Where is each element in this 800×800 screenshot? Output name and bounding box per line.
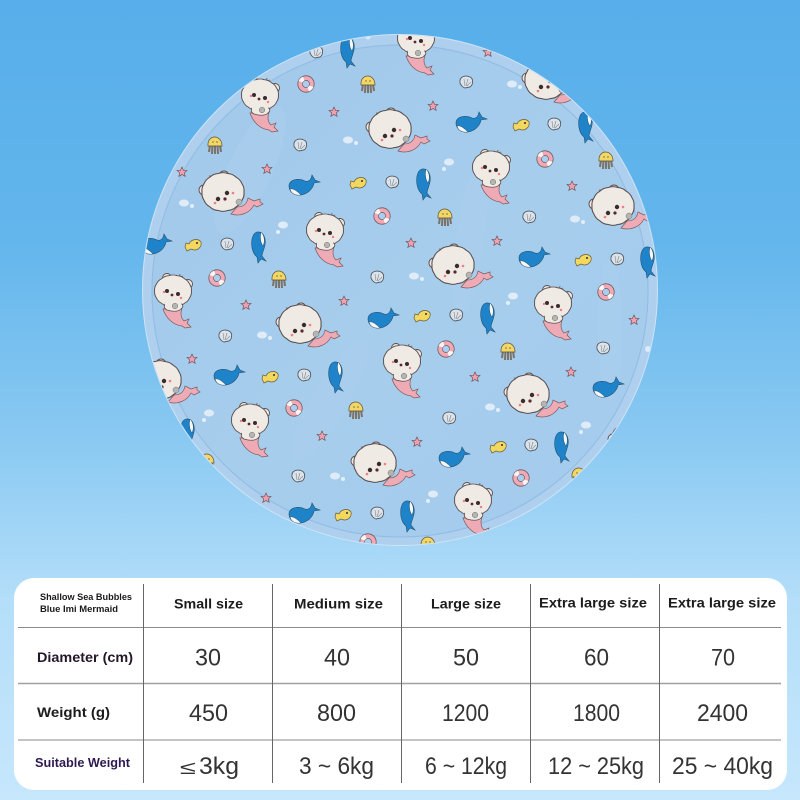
column headers: Extra large size [668, 594, 776, 610]
suitable weight values: 25 ~ 40kg [672, 753, 773, 780]
suitable weight values: 3kg [199, 753, 239, 780]
stars [177, 47, 639, 502]
weight values: 1200 [442, 700, 489, 727]
diameter values: 40 [324, 644, 350, 672]
printed pattern [136, 20, 672, 554]
card background [14, 578, 787, 790]
mat inner surface [152, 45, 648, 537]
weight values: 450 [189, 700, 228, 727]
shells [219, 46, 624, 519]
weight values [189, 700, 748, 727]
suitable weight values: 3 ~ 6kg [299, 753, 374, 780]
sideways mermaids [136, 59, 672, 486]
suitable weight values: ≤ [180, 758, 196, 779]
row labels: Weight (g) [37, 704, 110, 720]
table title: Shallow Sea Bubbles [40, 592, 132, 603]
row labels: Suitable Weight [35, 756, 131, 770]
diameter values: 70 [711, 644, 735, 672]
size table card [14, 578, 787, 790]
blue whales [141, 37, 655, 532]
column headers: Small size [174, 596, 243, 612]
weight values: 1800 [573, 700, 620, 727]
suitable weight values: 6 ~ 12kg [425, 753, 507, 780]
diameter values: 30 [195, 644, 221, 672]
column headers: Extra large size [539, 594, 647, 610]
suitable weight values [180, 753, 773, 780]
table title: Blue Imi Mermaid [40, 604, 118, 615]
suitable weight values: 12 ~ 25kg [548, 753, 644, 780]
row labels [35, 649, 133, 770]
weight values: 800 [317, 700, 356, 727]
bubbles [179, 34, 651, 503]
diameter values: 50 [453, 644, 479, 672]
round cooling mat [136, 20, 672, 554]
column headers: Medium size [294, 596, 383, 612]
diameter values: 60 [584, 644, 609, 672]
table title [40, 592, 132, 615]
mat fabric sheen [200, 97, 622, 470]
column headers: Large size [431, 596, 501, 612]
yellow fish [185, 120, 591, 521]
jellyfish [200, 76, 613, 554]
swim rings [209, 76, 614, 550]
weight values: 2400 [697, 700, 748, 727]
row labels: Diameter (cm) [37, 649, 133, 665]
table grid lines [18, 584, 781, 783]
column headers [174, 594, 776, 612]
diameter values [195, 644, 735, 672]
mat outer rim [142, 34, 658, 546]
upright mermaids [155, 20, 572, 537]
